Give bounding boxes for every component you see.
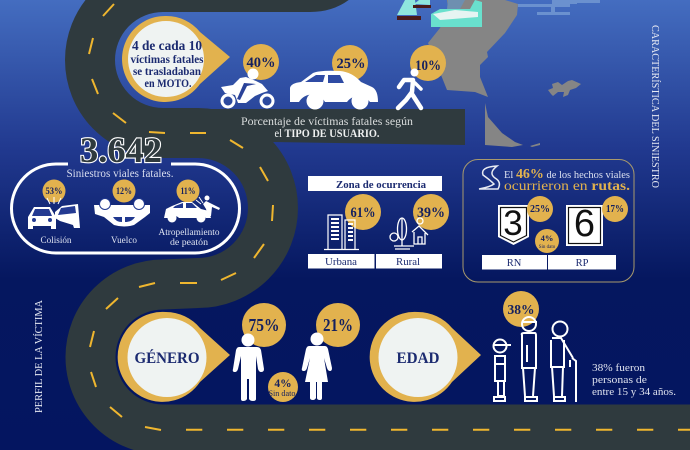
pin: edad: EDAD [396,350,440,367]
icon: woman [302,332,332,400]
icon: winding road [479,166,499,189]
pin: 4 de cada 10 [122,16,230,102]
heading: 46% en rutas: El 46% de los hechos viales [504,167,630,182]
stat: hombres 75% [233,303,286,401]
label: RP: RP [576,258,589,269]
text: 38% fueron: personas de [592,375,647,386]
panel: rutas [463,160,634,282]
stat: atropellamiento [158,180,220,248]
headline number: 3.642 [80,130,162,170]
stat: colisión [28,180,80,246]
stat: rural [376,194,449,268]
stat: sin dato 4%: 4% [541,233,553,243]
stat: sin dato 4% [535,229,559,253]
stat: car 25% [290,45,378,110]
icon: buildings [324,215,359,250]
sign: RN 3: 25% [530,204,550,215]
stat: mujeres 21%: 21% [323,315,353,335]
pin: 4 de cada 10: se trasladaban [133,66,202,78]
caption: tipo de usuario: el TIPO DE USUARIO. [274,128,380,140]
stat: atropellamiento: Atropellamiento [158,228,220,238]
stat: colisión: 53% [46,186,62,196]
label: RN: RN [507,258,522,269]
stat: sin dato 4% [268,372,298,402]
pin: edad [370,312,481,402]
sign: RP 6: 17% [606,204,624,215]
stat: atropellamiento: 11% [180,186,196,196]
heading: 46% en rutas: ocurrieron en rutas. [504,178,630,193]
text: 38% fueron [592,363,676,398]
pin: 4 de cada 10: víctimas fatales [130,54,204,66]
pin: género: GÉNERO [134,348,200,367]
text: 38% fueron: 38% fueron [592,363,646,374]
panel: siniestros viales fatales: Siniestros viales fatales. [66,168,174,180]
stat: car 25%: 25% [336,56,366,72]
panel: zona de ocurrencia [308,176,449,268]
label: característica del siniestro: CARACTERÍSTICA DEL SINIESTRO [649,25,661,188]
icon: motorcycle [221,68,273,107]
caption: tipo de usuario: Porcentaje de víctimas fatales según [241,116,413,128]
map: southern Argentina [428,0,581,147]
label: RN [482,255,547,270]
stat: sin dato 4%: Sin dato [539,245,556,250]
label: perfil de la víctima: PERFIL DE LA VÍCTIMA [33,300,45,413]
sign: RP 6 [566,196,628,246]
icon: rural house and trees [390,218,428,249]
stat: hombres 75%: 75% [248,315,280,335]
caption: tipo de usuario [241,116,413,140]
stat: vuelco: 12% [116,186,132,196]
heading: 46% en rutas [504,167,630,193]
pin: 4 de cada 10: 4 de cada 10 [132,38,202,53]
panel: zona de ocurrencia: Zona de ocurrencia [336,179,426,191]
stat: pedestrian 10% [398,45,446,108]
stat: rural: Rural [396,257,420,268]
sign: RP 6: 6 [574,203,595,245]
stat: rural: 39% [417,205,445,221]
stat: edad 38%: 38% [508,303,534,318]
pin: género [118,312,230,402]
pin: 4 de cada 10: en MOTO. [144,78,192,90]
panel: siniestros viales fatales [12,130,240,253]
road band: tipo de usuario [165,109,465,145]
stat: colisión: Colisión [40,236,72,246]
stat: moto 40% [221,44,279,107]
stat: vuelco: Vuelco [111,236,137,246]
stat: sin dato 4%: 4% [274,378,292,390]
stat: vuelco [94,180,150,246]
label: RP [548,255,616,270]
stat: edad 38% [503,291,539,327]
text: 38% fueron: entre 15 y 34 años. [592,387,676,398]
stat: sin dato 4%: Sin dato [268,389,296,398]
stat: moto 40%: 40% [246,55,276,71]
sign: RN 3 [498,196,553,245]
icon: car [290,71,378,102]
map decorations: boats, glacier, whale [397,0,600,27]
stat: urbana: 61% [350,205,376,221]
stat: atropellamiento: de peatón [170,238,208,248]
sign: RN 3: 3 [503,204,523,243]
icon: walking person [398,70,421,108]
stat: mujeres 21% [302,303,360,400]
stat: urbana: Urbana [325,257,357,268]
icon: man [233,334,264,401]
icon: three generations [494,317,576,402]
stat: pedestrian 10%: 10% [415,58,441,74]
stat: urbana [308,194,381,268]
